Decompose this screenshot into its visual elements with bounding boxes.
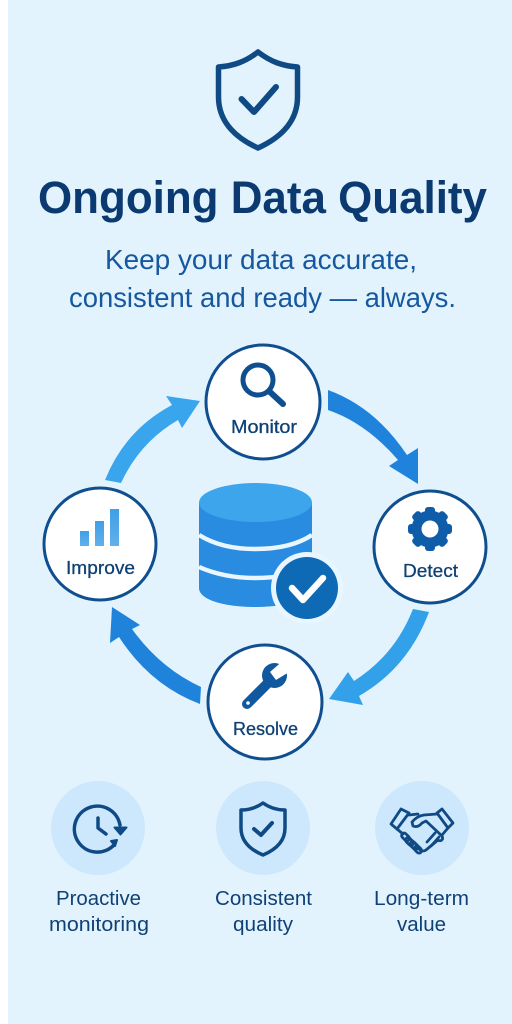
benefit: Long-term value xyxy=(374,781,469,936)
benefit: Proactive monitoring xyxy=(49,781,149,936)
label: Resolve: Resolve xyxy=(233,719,298,739)
icon: magnifier xyxy=(243,365,283,404)
icon: bar chart xyxy=(80,509,119,546)
icon: gear xyxy=(408,507,452,551)
node: Monitor xyxy=(206,345,320,459)
title: Ongoing Data Quality xyxy=(38,172,487,223)
label: quality xyxy=(233,914,293,936)
label: value xyxy=(397,914,446,936)
label: Monitor: Monitor xyxy=(231,417,297,437)
arrow: detect to resolve xyxy=(329,609,429,705)
icon: database with check badge xyxy=(199,483,343,624)
check badge xyxy=(271,552,343,624)
icon: shield with check xyxy=(241,803,285,855)
arrow: monitor to detect xyxy=(328,390,418,484)
label xyxy=(49,888,149,936)
subtitle: Keep your data accurate, xyxy=(105,244,417,275)
label: Improve: Improve xyxy=(66,558,135,578)
icon: clock with arrow xyxy=(74,806,126,852)
node: Improve xyxy=(44,488,156,600)
cycle arrows xyxy=(105,390,429,705)
icon: wrench xyxy=(246,659,294,705)
node: Resolve xyxy=(208,645,322,759)
label xyxy=(374,888,469,936)
subtitle: consistent and ready — always. xyxy=(69,282,456,313)
label: monitoring xyxy=(49,914,149,936)
label xyxy=(215,888,312,936)
arrow: improve to monitor xyxy=(105,396,200,483)
subtitle xyxy=(69,244,456,313)
arrow: resolve to improve xyxy=(110,607,201,704)
label: Detect: Detect xyxy=(403,561,458,581)
icon: header shield with check xyxy=(218,52,298,148)
benefit: Consistent quality xyxy=(215,781,312,936)
icon: handshake xyxy=(391,809,453,854)
node: Detect xyxy=(374,491,486,603)
label: Long-term xyxy=(374,888,469,910)
label: Consistent xyxy=(215,888,312,910)
label: Proactive xyxy=(56,888,141,910)
